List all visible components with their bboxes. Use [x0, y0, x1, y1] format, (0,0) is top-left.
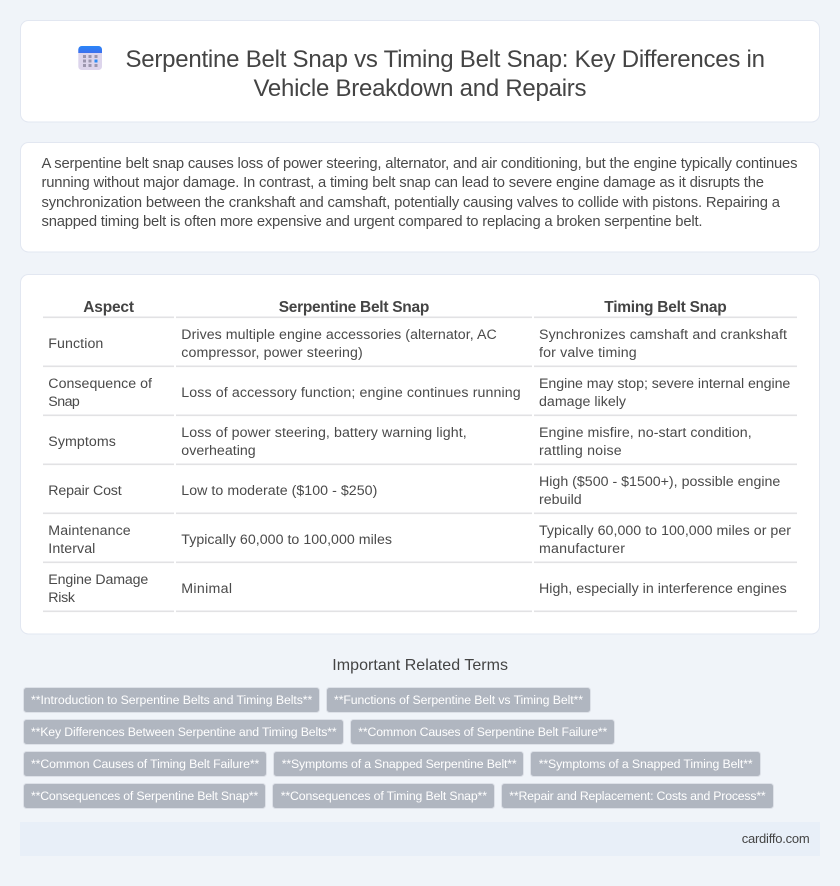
tag: serpentine symptoms	[274, 752, 524, 776]
tag: timing causes: **Common Causes of Timing Belt Failure**	[31, 757, 260, 771]
tag: functions	[326, 688, 590, 712]
row: maintenance interval: Typically 60,000 to 100,000 miles or per	[539, 523, 791, 539]
tag: timing consequences: **Consequences of Timing Belt Snap**	[281, 789, 487, 803]
row: symptoms: Engine misfire, no-start condition,	[539, 425, 752, 441]
row: function: Function	[48, 336, 103, 352]
row: engine damage risk: Risk	[48, 590, 76, 606]
row: symptoms	[48, 425, 752, 459]
table header row: Serpentine Belt Snap	[279, 299, 429, 316]
related term tags	[24, 688, 774, 808]
row: engine damage risk	[48, 572, 787, 606]
row: function: Synchronizes camshaft and crankshaft	[539, 327, 787, 343]
tag: timing causes	[24, 752, 266, 776]
tag: timing symptoms	[530, 752, 760, 776]
tag: timing consequences	[272, 784, 494, 808]
tag: key differences	[24, 720, 344, 744]
row: symptoms: Symptoms	[48, 434, 116, 450]
panel: comparison table	[20, 274, 820, 634]
row: maintenance interval: Interval	[48, 541, 95, 557]
tag: introduction: **Introduction to Serpentine Belts and Timing Belts**	[31, 693, 313, 707]
row: function: for valve timing	[539, 345, 637, 361]
text block: summary	[42, 156, 797, 230]
tag: repair: **Repair and Replacement: Costs and Process**	[509, 789, 766, 803]
tag: repair	[502, 784, 774, 808]
row: consequence of snap: damage likely	[539, 394, 627, 410]
table header row: Aspect	[83, 299, 134, 316]
row: consequence of snap: Consequence of	[48, 376, 152, 392]
row: function: Drives multiple engine accessories (alternator, AC	[181, 327, 497, 343]
row: maintenance interval: manufacturer	[539, 541, 625, 557]
heading: important related terms: Important Related Terms	[332, 657, 508, 674]
row: symptoms: rattling noise	[539, 443, 622, 459]
tag: serpentine causes: **Common Causes of Serpentine Belt Failure**	[358, 725, 608, 739]
row: engine damage risk: Engine Damage	[48, 572, 148, 588]
tag: serpentine symptoms: **Symptoms of a Snapped Serpentine Belt**	[282, 757, 517, 771]
title: Serpentine Belt Snap vs Timing Belt Snap: Key Differences in	[126, 46, 765, 73]
row: repair cost	[48, 474, 780, 508]
row: consequence of snap	[48, 376, 790, 410]
row: symptoms: Loss of power steering, battery warning light,	[181, 425, 467, 441]
tag: timing symptoms: **Symptoms of a Snapped Timing Belt**	[539, 757, 753, 771]
row: symptoms: overheating	[181, 443, 256, 459]
tag: serpentine causes	[350, 720, 614, 744]
row: maintenance interval: Maintenance	[48, 523, 131, 539]
row: consequence of snap: Engine may stop; severe internal engine	[539, 376, 790, 392]
footer	[20, 822, 820, 856]
row: consequence of snap: Loss of accessory function; engine continues running	[181, 385, 521, 401]
panel: header	[20, 20, 820, 122]
row: repair cost: Repair Cost	[48, 483, 122, 499]
tag: key differences: **Key Differences Between Serpentine and Timing Belts**	[31, 725, 337, 739]
tag: serpentine consequences: **Consequences of Serpentine Belt Snap**	[31, 789, 259, 803]
row: maintenance interval: Typically 60,000 to 100,000 miles	[181, 532, 392, 548]
icon: calendar	[78, 46, 102, 70]
table row lines	[43, 316, 797, 612]
tag: serpentine consequences	[24, 784, 266, 808]
row: function	[48, 327, 787, 361]
row: repair cost: High ($500 - $1500+), possible engine	[539, 474, 780, 490]
tag: functions: **Functions of Serpentine Belt vs Timing Belt**	[334, 693, 583, 707]
row: function: compressor, power steering)	[181, 345, 363, 361]
table header row: Timing Belt Snap	[604, 299, 727, 316]
row: engine damage risk: Minimal	[181, 581, 232, 597]
row: repair cost: Low to moderate ($100 - $250)	[181, 483, 377, 499]
tag: introduction	[24, 688, 320, 712]
text block: summary: A serpentine belt snap causes loss of power steering, alternator, and air conditioning, but the engine typically continues	[42, 156, 797, 172]
text block: summary: snapped timing belt is often more expensive and urgent compared to replacing a broken serpentine belt.	[42, 214, 702, 230]
text block: summary: running without major damage. In contrast, a timing belt snap can lead to severe engine damage as it disrupts the	[42, 175, 764, 191]
row: maintenance interval	[48, 523, 791, 557]
row: consequence of snap: Snap	[48, 394, 80, 410]
row: engine damage risk: High, especially in interference engines	[539, 581, 787, 597]
text block: summary: synchronization between the crankshaft and camshaft, potentially causing valves to collide with pistons. Repairing a	[42, 195, 781, 211]
footer: cardiffo.com	[742, 831, 810, 846]
title: Vehicle Breakdown and Repairs	[254, 75, 586, 102]
row: repair cost: rebuild	[539, 492, 582, 508]
panel: description	[20, 142, 820, 252]
table header row	[83, 299, 727, 316]
title	[126, 46, 765, 102]
